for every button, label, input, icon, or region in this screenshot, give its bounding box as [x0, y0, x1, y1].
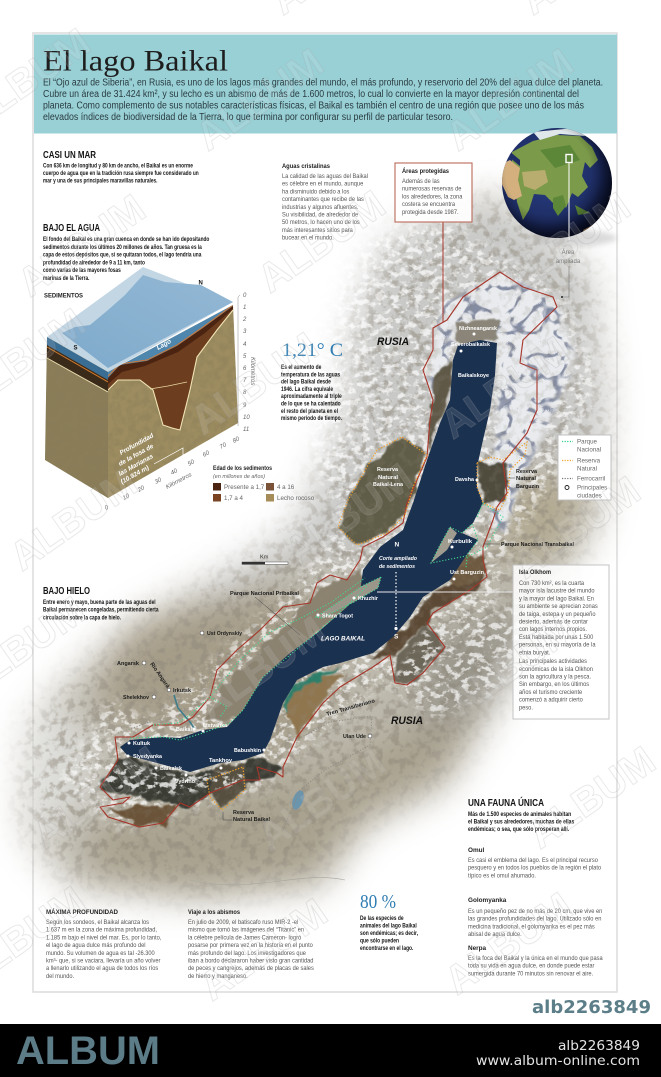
white place labels: Vydrino	[175, 779, 196, 785]
white place labels: Kurbulik	[448, 539, 473, 545]
section cut line: de sedimentos	[379, 564, 415, 570]
section: Una fauna única: endémicas; o sea, que sólo prosperan allí.	[468, 827, 570, 833]
label: enlarged area: ampliada	[556, 259, 581, 265]
section: Casi un mar: Con 636 km de longitud y 80 km de ancho, el Baikal es un enorme	[43, 163, 193, 170]
white place labels: Severobaikalsk	[451, 342, 491, 348]
depth axis: 3	[243, 329, 247, 335]
stat: 1,21 C: aproximadamente al triple	[281, 394, 342, 400]
watermarks: ALBUM	[188, 40, 331, 159]
species: Omul: típico es el omul ahumado.	[468, 873, 536, 879]
watermarks: ALBUM	[495, 184, 638, 303]
block diagram: sediments: N	[198, 280, 203, 286]
snow field north of lake	[428, 274, 575, 535]
sediment age legend: Edad de los sedimentos	[213, 465, 272, 472]
dark place labels: Tren Transiberiano	[326, 698, 376, 718]
depth axis: 4	[243, 342, 247, 348]
callout: protected areas: costera se encuentra	[402, 202, 456, 208]
dark place labels	[117, 469, 574, 823]
stat: 1,21 C: el resto del planeta en el	[281, 408, 338, 415]
section: Máxima profundidad: el lago de agua dulce más profundo del	[46, 943, 146, 949]
dark place labels: Parque Nacional Transbaikal	[501, 542, 574, 548]
stat: 80 percent: 80 %	[360, 891, 396, 913]
globe locator	[500, 128, 617, 246]
callout: Olkhon island: Está habitada por unas 1.500	[519, 635, 594, 641]
distance axis: 30	[154, 477, 163, 486]
dark place labels: Ulan Ude	[343, 734, 366, 740]
stat: 80 percent: encontrarse en el lago.	[360, 946, 414, 952]
distance axis: 70	[219, 442, 228, 451]
section: Máxima profundidad: km³- que, si se vaciara, llevaría un año volver	[46, 958, 160, 965]
map legend: Nacional	[577, 446, 601, 454]
species: Nerpa	[468, 945, 603, 977]
section: Bajo hielo: circulación sobre la capa de hielo.	[43, 615, 121, 622]
depth axis: Kilómetros	[249, 357, 255, 385]
white place labels	[133, 326, 498, 785]
white settlement dots	[126, 332, 478, 776]
distance axis: 0	[104, 505, 110, 512]
callout: Olkhon island: personas, en su mayoría de la	[519, 642, 596, 649]
distance axis: 60	[202, 450, 211, 459]
white place labels: Davsha	[455, 477, 475, 483]
stat: 80 percent: que sólo pueden	[360, 938, 399, 945]
callout: Olkhon island: etnia buryat.	[519, 650, 551, 656]
section: Máxima profundidad: mundo. Su volumen de agua es tal -26.300	[46, 951, 155, 957]
section: Bajo hielo	[43, 586, 159, 622]
section: Aguas cristalinas: La calidad de las aguas del Baikal	[282, 174, 368, 180]
section: Aguas cristalinas: bucear en el mundo.	[282, 235, 334, 242]
map legend	[558, 435, 611, 500]
heading: El lago Baikal	[43, 44, 228, 78]
stat: 1,21 C: de lo que se ha calentado	[281, 401, 341, 408]
label: enlarged area: Área	[562, 249, 575, 256]
section: Máxima profundidad	[46, 907, 162, 980]
map legend: Ferrocarril	[577, 476, 605, 482]
block diagram: sediments: las Marianas	[118, 453, 155, 478]
dark place labels: Angarsk	[117, 661, 140, 667]
callout: Olkhon island: desierto, además de contar	[519, 619, 588, 626]
intro paragraph: planeta. Como complemento de sus notables características físicas, el Baikal es también el centro de una región que posee uno de los más	[43, 100, 584, 112]
species: Omul: pesquero y en todos los pueblos de la región el plato	[468, 866, 602, 872]
map labels	[117, 326, 574, 823]
map legend: Principales	[577, 484, 607, 492]
section: Bajo el agua: como varias de las mayores fosas	[43, 268, 121, 274]
section: Viaje a los abismos: mismo que tomó las imágenes del “Titanic” en	[188, 928, 304, 934]
white place labels: Kultuk	[133, 741, 151, 747]
dark place labels: Natural	[516, 476, 536, 482]
callout: Olkhon island: Sin embargo, en los últimos	[519, 682, 589, 688]
section: Aguas cristalinas: ha disminuido debido a los	[282, 189, 349, 195]
sediment age legend: (en millones de años)	[213, 474, 265, 480]
watermarks: ALBUM	[520, 738, 661, 857]
section: Aguas cristalinas: más interesantes sitios para	[282, 228, 353, 234]
block diagram: sediments: (10.924 m)	[120, 464, 150, 486]
section: Aguas cristalinas: es célebre en el mundo, aunque	[282, 182, 364, 188]
callout: Olkhon island: años el turismo creciente	[519, 690, 583, 696]
section: Casi un mar	[43, 150, 199, 185]
species: Golomyanka: medicina tradicional, el golomyanka es el pez más	[468, 924, 595, 930]
section: Máxima profundidad: 1.185 m bajo el nivel del mar. Es, por lo tanto,	[46, 935, 162, 941]
section: Viaje a los abismos: iban a bordo declararon haber visto gran cantidad	[188, 958, 313, 965]
section: Casi un mar: mar y una de sus principales maravillas naturales.	[43, 178, 158, 185]
depth axis: 5	[243, 354, 247, 360]
watermarks: ALBUM	[25, 738, 168, 857]
sediment age legend: Presente a 1,7	[224, 484, 265, 491]
section: Máxima profundidad: Según los sondeos, el Baikal alcanza los	[46, 920, 149, 926]
white place labels: Tankhoy	[209, 758, 233, 764]
callout: Olkhon island: y la mayor del lago Baikal. En	[519, 596, 594, 602]
depth axis: 6	[243, 366, 247, 372]
callout: protected areas: los alrededores, la zona	[402, 194, 463, 200]
sediment age legend: 4 a 16	[277, 484, 295, 491]
white place labels: Baikalskoye	[458, 373, 489, 379]
depth axis: 7	[243, 378, 247, 384]
dark place labels: Reserva	[233, 810, 255, 816]
section: Máxima profundidad: del mundo.	[46, 974, 74, 980]
Olkhon island	[316, 577, 381, 618]
section: Una fauna única: Más de 1.500 especies de animales habitan	[468, 812, 572, 818]
depth axis: 8	[243, 390, 247, 396]
sediment age legend: 1,7 a 4	[224, 495, 243, 502]
nature reserves dotted boundary	[207, 437, 527, 810]
section: Bajo el agua: profundidad de alrededor de 9 a 11 km, tanto	[43, 260, 146, 267]
callout: Olkhon island: mayor isla lacustre del mundo	[519, 589, 595, 595]
section cut line	[379, 542, 418, 640]
scale bar: Km	[260, 554, 269, 560]
section: Viaje a los abismos: de peces y cangrejos, además de placas de sales	[188, 966, 314, 972]
section: Bajo el agua: sedimentos durante los últimos 20 millones de años. Tan gruesa es la	[43, 244, 203, 251]
distance axis	[104, 436, 241, 512]
map legend: ciudades	[577, 492, 602, 500]
stat: 80 percent: animales del lago Baikal	[360, 923, 417, 930]
page frame	[33, 33, 617, 992]
callout: Olkhon island: Con 730 km², es la cuarta	[519, 581, 585, 587]
callout: Olkhon island: peso.	[519, 705, 533, 711]
stat: 80 percent	[360, 891, 418, 952]
callout: Olkhon island: con lagos internos propios.	[519, 627, 587, 633]
callout: Olkhon island: económicas de la isla Olkhon	[519, 667, 593, 673]
section: Aguas cristalinas	[282, 163, 368, 242]
stat: 1,21 C: mismo período de tiempo.	[281, 416, 342, 422]
stat: 1,21 C	[281, 340, 343, 422]
section cut line: Corte ampliado	[379, 556, 418, 562]
footer bar: www.album-online.com	[476, 1053, 640, 1069]
watermarks: ALBUM	[438, 40, 581, 159]
callout: protected areas	[395, 163, 472, 322]
species: Omul: Es casi el emblema del lago. Es el principal recurso	[468, 858, 599, 864]
section: Viaje a los abismos: la célebre película de James Cameron- logró	[188, 935, 302, 941]
white place labels: Baikalsk	[160, 766, 183, 772]
sediment age legend: Lecho rocoso	[277, 495, 315, 502]
species: Golomyanka: abisal de agua dulce.	[468, 932, 522, 938]
depth axis	[238, 293, 255, 433]
image id: alb2263849	[532, 997, 651, 1018]
distance axis: Kilómetros	[165, 472, 193, 491]
watermarks: ALBUM	[437, 884, 580, 1003]
intro paragraph	[43, 78, 603, 123]
section: Una fauna única: UNA FAUNA ÚNICA	[468, 796, 544, 809]
map legend: Natural	[577, 466, 597, 472]
depth axis: 1	[243, 305, 246, 311]
white place labels: Listvanka	[203, 723, 228, 729]
section: Aguas cristalinas: Aguas cristalinas	[282, 163, 330, 170]
protected area boundary	[100, 272, 557, 827]
section: Bajo hielo: BAJO HIELO	[43, 586, 90, 597]
watermarks: ALBUM	[2, 460, 145, 579]
section: Aguas cristalinas: industrias y algunos afluentes.	[282, 205, 359, 211]
section: Casi un mar: CASI UN MAR	[43, 150, 97, 161]
callout: protected areas: protegida desde 1987.	[402, 210, 459, 216]
distance axis: 10	[122, 493, 131, 502]
white place labels: Nizhneangarsk	[459, 326, 498, 332]
lake Baikal water	[120, 340, 497, 772]
intro paragraph: elevados índices de biodiversidad de la Tierra, lo que termina por configurar su perfil de particular tesoro.	[43, 112, 453, 123]
block diagram: sediments	[40, 267, 245, 505]
white place labels: Natural	[378, 475, 398, 481]
title banner	[34, 34, 617, 134]
depth axis: 2	[242, 317, 247, 323]
callout: Olkhon island: Las principales actividades	[519, 659, 587, 665]
dark place labels: Río Angará	[148, 662, 171, 690]
section: Viaje a los abismos: de hierro y manganeso.	[188, 974, 248, 980]
stat: 1,21 C: temperatura de las aguas	[281, 372, 340, 378]
stat: 1,21 C: del lago Baikal desde	[281, 379, 331, 386]
section: Una fauna única	[468, 796, 603, 977]
distance axis: 80	[232, 436, 241, 445]
white place labels: Ust Barguzin	[450, 570, 485, 576]
section: Bajo el agua	[43, 223, 210, 282]
depth axis: 11	[243, 427, 249, 433]
stat: 80 percent: son endémicas; es decir,	[360, 931, 418, 937]
species: Omul	[468, 847, 602, 879]
callout: Olkhon island: su ambiente se aprecian zonas	[519, 604, 598, 610]
map legend: Reserva	[577, 458, 601, 464]
watermarks: ALBUM	[192, 890, 335, 1009]
diagram labels: Lago	[156, 338, 173, 352]
callout: protected areas: numerosas reservas de	[402, 187, 462, 193]
watermarks: ALBUM	[433, 328, 576, 447]
species: Golomyanka: Es un pequeño pez de no más de 20 cm, que vive en	[468, 909, 602, 915]
section: Bajo el agua: marinas de la Tierra.	[43, 276, 90, 282]
watermarks: ALBUM	[190, 608, 333, 727]
white place labels: Babushkin	[234, 748, 262, 754]
label: enlarged area	[556, 249, 581, 298]
species: Nerpa: Es la foca del Baikal y la única en el mundo que pasa	[468, 956, 603, 962]
dark place labels: Parque Nacional Pribaikal	[230, 591, 299, 597]
distance axis: 50	[187, 459, 196, 468]
callout: protected areas: Además de las	[402, 179, 440, 185]
section: Bajo hielo: Entre enero y mayo, buena parte de las aguas del	[43, 600, 156, 606]
distance axis: 20	[136, 485, 146, 494]
section: Viaje a los abismos: Viaje a los abismos	[188, 909, 240, 916]
depth axis: 0	[243, 293, 247, 299]
depth axis: 10	[243, 415, 250, 421]
white place labels: Slyedyanka	[133, 754, 163, 760]
white place labels: Baikal-Lena	[373, 482, 404, 488]
species: Nerpa: Nerpa	[468, 945, 487, 952]
stat: 1,21 C: 1,21° C	[282, 340, 343, 361]
watermarks: ALBUM	[440, 606, 583, 725]
watermarks: ALBUM	[250, 740, 393, 859]
section: Bajo hielo: Baikal permanecen congeladas, permitiendo cierta	[43, 607, 159, 614]
distance axis: 40	[170, 468, 179, 477]
section: Viaje a los abismos: En julio de 2009, el batiscafo ruso MIR-2 -el	[188, 920, 298, 926]
block diagram: sediments: SEDIMENTOS	[44, 292, 84, 300]
railway	[118, 716, 372, 830]
species: Golomyanka: Golomyanka	[468, 897, 507, 904]
section: Máxima profundidad: 1.637 m en la zona de máxima profundidad,	[46, 928, 157, 934]
block diagram: sediments: de la fosa de	[118, 443, 155, 468]
map legend: Parque	[577, 438, 598, 446]
species: Golomyanka	[468, 897, 602, 938]
watermarks: ALBUM	[183, 324, 326, 443]
sediment age legend	[213, 465, 315, 502]
callout: Olkhon island	[377, 565, 609, 719]
section: Viaje a los abismos: más profundo del lago. Los investigadores que	[188, 951, 307, 957]
section: Máxima profundidad: MÁXIMA PROFUNDIDAD	[46, 907, 118, 916]
section cut line: S	[394, 634, 399, 640]
callout: Olkhon island: Isla Olkhom	[519, 569, 551, 576]
section: Viaje a los abismos: posarse por primera vez en la historia en el punto	[188, 943, 313, 949]
lake surface	[47, 267, 233, 372]
dark place labels: Irkutsk	[173, 688, 192, 694]
terrain background	[3, 176, 630, 924]
block diagram: sediments: Profundidad	[119, 432, 156, 457]
right wall	[108, 305, 238, 498]
dark place labels: Shelekhov	[123, 695, 150, 701]
river Angara and small lake	[174, 695, 345, 885]
watermarks: ALBUM	[250, 182, 393, 301]
section: Bajo el agua: capa de estos depósitos que, si se quitaran todos, el lago tendría una	[43, 252, 202, 259]
section: Bajo el agua: El fondo del Baikal es una gran cuenca en donde se han ido depositando	[43, 237, 210, 243]
lake name: LAGO BAIKAL	[321, 636, 365, 642]
section: Viaje a los abismos	[188, 909, 314, 980]
section: Aguas cristalinas: Su visibilidad, de alrededor de	[282, 212, 359, 219]
country labels: RUSIA	[391, 715, 423, 727]
species: Nerpa: toda su vida en agua dulce, en donde puede estar	[468, 964, 594, 970]
section: Bajo el agua: BAJO EL AGUA	[43, 223, 100, 234]
section: Máxima profundidad: a llenarlo utilizando el agua de todos los ríos	[46, 966, 158, 972]
dark place labels: Ust Ordynskiy	[207, 631, 243, 637]
white place labels: Khuzhir	[358, 596, 379, 602]
white place labels: Baikal	[176, 727, 192, 733]
scale bar	[242, 554, 288, 564]
stat: 80 percent: De las especies de	[360, 916, 404, 922]
stat: 1,21 C: Es el aumento de	[281, 365, 321, 371]
white place labels: Shara Togot	[322, 614, 353, 620]
watermarks: ALBUM	[10, 186, 153, 305]
callout: Olkhon island: son la agricultura y la pesca.	[519, 674, 591, 681]
intro paragraph: Cubre un área de 31.424 km², y su lecho es un abismo de más de 1.600 metros, lo cual lo convierte en la mayor depresión continental del	[43, 89, 579, 100]
block diagram: sediments: S	[74, 346, 78, 352]
callout: Olkhon island: comenzó a adquirir cierto	[519, 697, 583, 704]
watermarks: ALBUM	[505, 468, 648, 587]
section: Aguas cristalinas: 50 metros, lo hacen uno de los	[282, 220, 360, 226]
map: Lake Baikal satellite view	[3, 176, 630, 924]
city dots	[142, 631, 372, 738]
footer bar	[0, 1024, 661, 1077]
species: Omul: Omul	[468, 847, 485, 854]
stat: 1,21 C: 1946. La cifra equivale	[281, 387, 333, 393]
dark place labels: Reserva	[516, 469, 538, 475]
national parks dotted boundary	[130, 503, 503, 740]
section: Una fauna única: el Baikal y sus alrededores, muchas de ellas	[468, 819, 574, 826]
Chivyrkuy peninsula	[431, 527, 457, 563]
section cut line: N	[394, 542, 400, 548]
country labels	[377, 336, 423, 727]
country labels: RUSIA	[377, 336, 409, 348]
callout: Olkhon island: de taiga, estepa y un pequeño	[519, 612, 596, 618]
watermarks: ALBUM	[277, 455, 420, 574]
section: Aguas cristalinas: contaminantes que recibe de las	[282, 197, 364, 203]
callout: protected areas: Áreas protegidas	[402, 166, 449, 175]
footer bar: ALBUM	[16, 1029, 160, 1073]
leader lines	[223, 478, 515, 820]
section: Casi un mar: cuerpo de agua que en la tradición rusa siempre fue considerado un	[43, 171, 199, 177]
species: Nerpa: sumergida durante 70 minutos sin renovar el aire.	[468, 971, 593, 977]
species: Golomyanka: las grandes profundidades del lago. Utilizado sólo en	[468, 917, 601, 923]
footer bar: alb2263849	[558, 1038, 640, 1054]
white place labels: Reserva	[377, 467, 399, 473]
depth axis: 9	[243, 403, 247, 409]
dark place labels: Barguzin	[516, 484, 540, 490]
dark place labels: Natural Baikal	[233, 817, 270, 823]
left wall	[45, 337, 108, 498]
